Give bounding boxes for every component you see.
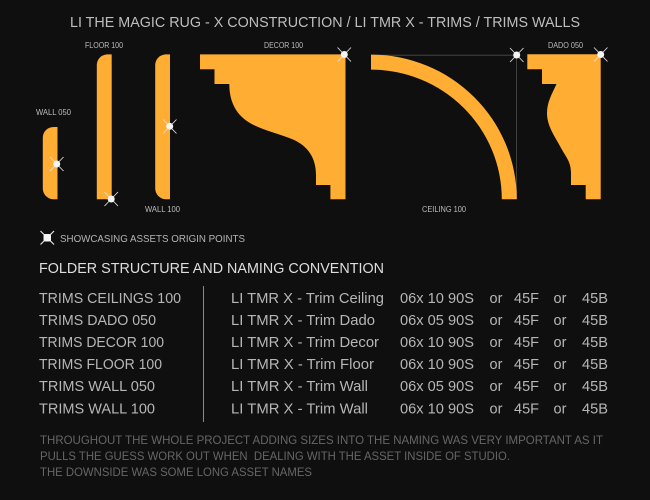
trim profile: ceiling 100 with guide lines	[371, 48, 524, 214]
45F column: 45F	[514, 357, 539, 373]
size suffix column: 06x 10 90S	[400, 335, 474, 351]
second or column: or	[554, 335, 567, 351]
45F column: 45F	[514, 313, 539, 329]
45F column: 45F	[514, 402, 539, 418]
section heading: FOLDER STRUCTURE AND NAMING CONVENTION	[39, 261, 384, 277]
trim profile: ceiling 100 with guide lines: CEILING 100	[422, 204, 466, 214]
first or column: or	[490, 291, 503, 307]
folder names list: TRIMS DECOR 100	[39, 335, 164, 351]
second or column: or	[554, 313, 567, 329]
size suffix column	[400, 291, 474, 418]
trim profile: dado 050: DADO 050	[548, 40, 583, 50]
trim profile: decor 100	[200, 40, 351, 199]
first or column: or	[490, 335, 503, 351]
folder names list: TRIMS FLOOR 100	[39, 357, 162, 373]
45B column: 45B	[582, 313, 608, 329]
trim profile: decor 100: DECOR 100	[264, 40, 303, 50]
first or column: or	[490, 379, 503, 395]
45F column: 45F	[514, 379, 539, 395]
title: LI THE MAGIC RUG - X CONSTRUCTION / LI TMR X - TRIMS / TRIMS WALLS	[70, 15, 580, 31]
folder names list: TRIMS WALL 050	[39, 379, 155, 395]
asset names list: LI TMR X - Trim Decor	[231, 335, 379, 351]
size suffix column: 06x 10 90S	[400, 402, 474, 418]
footnote text	[40, 433, 604, 479]
trim profile: wall 100	[145, 54, 180, 214]
trim profile: floor 100: FLOOR 100	[85, 40, 123, 50]
45B column	[582, 291, 608, 418]
second or column	[554, 291, 567, 418]
size suffix column: 06x 10 90S	[400, 291, 474, 307]
asset names list: LI TMR X - Trim Wall	[231, 379, 368, 395]
second or column: or	[554, 402, 567, 418]
45B column: 45B	[582, 291, 608, 307]
trim profile: wall 050: WALL 050	[36, 107, 71, 117]
asset names list: LI TMR X - Trim Ceiling	[231, 291, 384, 307]
footnote text: THE DOWNSIDE WAS SOME LONG ASSET NAMES	[40, 465, 312, 479]
size suffix column: 06x 10 90S	[400, 357, 474, 373]
asset names list: LI TMR X - Trim Floor	[231, 357, 374, 373]
asset names list: LI TMR X - Trim Dado	[231, 313, 375, 329]
45F column: 45F	[514, 335, 539, 351]
footnote text: PULLS THE GUESS WORK OUT WHEN DEALING WITH THE ASSET INSIDE OF STUDIO.	[40, 449, 510, 463]
first or column	[490, 291, 503, 418]
size suffix column: 06x 05 90S	[400, 313, 474, 329]
trim profile: wall 100: WALL 100	[145, 204, 180, 214]
legend: origin point marker: SHOWCASING ASSETS ORIGIN POINTS	[60, 233, 245, 245]
folder names list: TRIMS DADO 050	[39, 313, 156, 329]
45B column: 45B	[582, 357, 608, 373]
trim profile: dado 050	[527, 40, 608, 199]
vertical divider	[203, 286, 204, 422]
first or column: or	[490, 357, 503, 373]
size suffix column: 06x 05 90S	[400, 379, 474, 395]
second or column: or	[554, 379, 567, 395]
folder names list: TRIMS CEILINGS 100	[39, 291, 181, 307]
second or column: or	[554, 357, 567, 373]
footnote text: THROUGHOUT THE WHOLE PROJECT ADDING SIZES INTO THE NAMING WAS VERY IMPORTANT AS IT	[40, 433, 604, 447]
45F column: 45F	[514, 291, 539, 307]
asset names list	[231, 291, 384, 418]
asset names list: LI TMR X - Trim Wall	[231, 402, 368, 418]
folder names list: TRIMS WALL 100	[39, 402, 155, 418]
folder names list	[39, 291, 181, 418]
45B column: 45B	[582, 335, 608, 351]
trim profile: floor 100	[85, 40, 123, 206]
second or column: or	[554, 291, 567, 307]
trim profile: wall 050	[36, 107, 71, 199]
first or column: or	[490, 402, 503, 418]
45B column: 45B	[582, 379, 608, 395]
45F column	[514, 291, 539, 418]
first or column: or	[490, 313, 503, 329]
45B column: 45B	[582, 402, 608, 418]
